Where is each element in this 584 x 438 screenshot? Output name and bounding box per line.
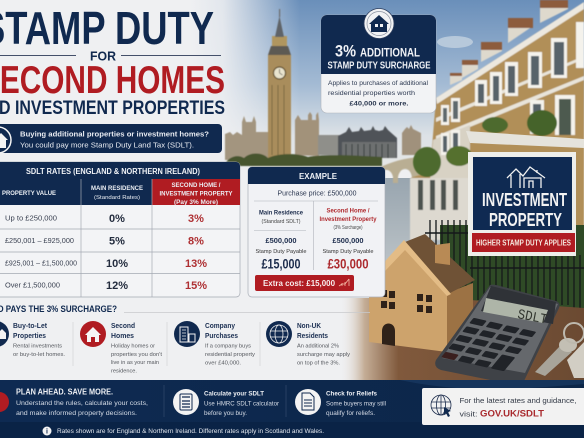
item: company purchases: over £40,000. <box>205 360 242 366</box>
note: rates coverage: i <box>46 428 48 436</box>
item: company purchases <box>174 321 255 366</box>
example column: second home: Investment Property <box>320 216 377 223</box>
check for reliefs: Check for Reliefs <box>326 390 377 398</box>
item: non-UK residents: An additional 2% <box>297 344 339 350</box>
row: up to 250k: 3% <box>188 213 204 225</box>
callout: buying additional properties: Buying additional properties or investment homes? <box>20 130 210 138</box>
example column: second home: (3% Surcharge) <box>334 225 363 231</box>
example column: second home: Second Home / <box>326 208 370 214</box>
item: company purchases: Company <box>205 321 236 330</box>
row: 250k to 925k: 5% <box>109 236 125 248</box>
example column: main residence: Stamp Duty Payable <box>256 249 306 255</box>
illustration: house keys <box>535 323 584 378</box>
check for reliefs: qualify for reliefs. <box>326 411 375 417</box>
example column: main residence: Main Residence <box>259 210 303 216</box>
row: 925k to 1.5m: £925,001 – £1,500,000 <box>5 260 77 268</box>
row: over 1.5m: Over £1,500,000 <box>5 282 60 290</box>
row: 250k to 925k: £250,001 – £925,000 <box>5 238 74 245</box>
item: second homes: live in as your main <box>111 360 159 366</box>
sign beam <box>466 131 584 148</box>
illustration: Big Ben and Parliament <box>224 9 421 183</box>
check for reliefs: Some buyers may still <box>326 402 386 408</box>
row: up to 250k: 0% <box>109 213 125 225</box>
column headers: SECOND HOME / <box>172 182 221 189</box>
callout: latest guidance link: visit: <box>460 410 478 418</box>
item: company purchases: residential property <box>205 352 255 358</box>
item: non-UK residents: on top of the 3%. <box>297 360 340 366</box>
panel: example <box>248 167 385 297</box>
callout: latest guidance link: For the latest rates and guidance, <box>460 396 576 405</box>
item: buy-to-let: Rental investments <box>13 344 62 350</box>
icon: globe with cursor <box>431 395 451 417</box>
item: buy-to-let: Properties <box>13 331 46 340</box>
callout: 3% additional surcharge: ADDITIONAL <box>360 46 420 60</box>
panel: example: EXAMPLE <box>299 172 338 181</box>
illustration: calculator <box>435 285 560 385</box>
row: up to 250k <box>5 213 204 225</box>
illustration: wooden table <box>340 298 584 380</box>
plan ahead: PLAN AHEAD. SAVE MORE. <box>16 388 113 396</box>
title <box>0 2 225 119</box>
icon: house badge <box>364 8 394 38</box>
panel: example: Purchase price: £500,000 <box>278 190 357 198</box>
extra cost button: Extra cost: £15,000 <box>263 279 336 288</box>
example column: second home: £500,000 <box>332 238 364 245</box>
icon: house <box>0 127 11 153</box>
plan ahead: and make informed property decisions. <box>16 410 137 417</box>
plan ahead <box>0 388 148 417</box>
bridge <box>372 157 420 183</box>
item: non-UK residents: surcharge may apply <box>297 352 350 358</box>
column headers: MAIN RESIDENCE <box>91 185 143 192</box>
row: 250k to 925k: 8% <box>188 236 204 248</box>
trees <box>413 147 441 177</box>
column headers <box>2 182 233 206</box>
callout: 3% additional surcharge: 3% <box>335 42 356 60</box>
callout: latest guidance link: GOV.UK/SDLT <box>480 408 544 420</box>
example column: main residence <box>256 210 306 272</box>
item: company purchases: If a company buys <box>205 344 251 350</box>
callout: buying additional properties <box>0 124 222 153</box>
item: non-UK residents: Residents <box>297 331 328 340</box>
item: second homes: Second <box>111 321 135 330</box>
item: non-UK residents <box>266 321 350 366</box>
illustration: railings and hedge <box>425 220 584 310</box>
subtitle: for: FOR <box>90 50 116 64</box>
check for reliefs <box>295 389 386 417</box>
column headers: (Pay 3% More) <box>174 200 218 206</box>
item: non-UK residents: Non-UK <box>297 321 322 330</box>
row: over 1.5m <box>5 280 207 292</box>
calculator keys <box>441 318 536 371</box>
calculate your SDLT <box>173 389 279 417</box>
illustration: wooden house model <box>362 234 475 352</box>
callout: 3% additional surcharge: residential properties worth <box>328 90 415 97</box>
row: 925k to 1.5m <box>5 258 207 270</box>
example column: second home: £30,000 <box>328 256 369 272</box>
calculate your SDLT: Calculate your SDLT <box>204 390 265 398</box>
example column: second home: Stamp Duty Payable <box>322 249 374 255</box>
note: rates coverage: Rates shown are for England & Northern Ireland. Different rates apply in Scotland and Wales. <box>57 429 324 435</box>
icon: houses <box>507 167 545 188</box>
column headers: PROPERTY VALUE <box>2 190 57 197</box>
callout: 3% additional surcharge: STAMP DUTY SURCHARGE <box>328 60 430 72</box>
callout: 3% additional surcharge: £40,000 or more. <box>350 100 409 108</box>
row: over 1.5m: 15% <box>185 280 207 292</box>
item: buy-to-let: or buy-to-let homes. <box>13 352 65 358</box>
calculate your SDLT: before you buy. <box>204 411 247 417</box>
example column: main residence: (Standard SDLT) <box>262 219 301 225</box>
column headers: (Standard Rates) <box>94 195 140 201</box>
row: 925k to 1.5m: 10% <box>106 258 128 270</box>
footer band <box>0 380 584 438</box>
calculate your SDLT: Use HMRC SDLT calculator <box>204 402 279 408</box>
sign: investment property <box>466 131 584 256</box>
illustration: Victorian terrace <box>410 0 584 240</box>
example column: second home <box>320 208 377 272</box>
callout: latest guidance link <box>422 388 584 425</box>
row: 925k to 1.5m: 13% <box>185 258 207 270</box>
row: over 1.5m: 12% <box>106 280 128 292</box>
plan ahead: Understand the rules, calculate your costs, <box>16 400 148 407</box>
river <box>385 178 440 300</box>
item: second homes: properties you don't <box>111 352 162 358</box>
row: up to 250k: Up to £250,000 <box>5 216 57 222</box>
item: second homes: residence. <box>111 368 137 374</box>
callout: 3% additional surcharge: Applies to purchases of additional <box>328 80 428 87</box>
callout: buying additional properties: You could pay more Stamp Duty Land Tax (SDLT). <box>20 140 194 150</box>
item: buy-to-let <box>0 321 65 358</box>
example column: main residence: £15,000 <box>262 256 301 272</box>
item: second homes <box>80 321 162 374</box>
row: 250k to 925k <box>5 236 204 248</box>
note: rates coverage <box>42 426 324 436</box>
callout: 3% additional surcharge <box>321 8 436 113</box>
column headers: INVESTMENT PROPERTY <box>160 190 233 198</box>
table heading: SDLT RATES (ENGLAND & NORTHERN IRELAND) <box>26 167 200 176</box>
item: second homes: Homes <box>111 331 134 340</box>
section: who pays the surcharge <box>0 304 370 374</box>
panel: SDLT rates table <box>0 162 240 297</box>
item: buy-to-let: Buy-to-Let <box>13 321 48 330</box>
item: company purchases: Purchases <box>205 331 238 340</box>
example column: main residence: £500,000 <box>266 238 297 245</box>
item: second homes: Holiday homes or <box>111 344 155 350</box>
calculator screen text: SDLT <box>516 307 549 329</box>
